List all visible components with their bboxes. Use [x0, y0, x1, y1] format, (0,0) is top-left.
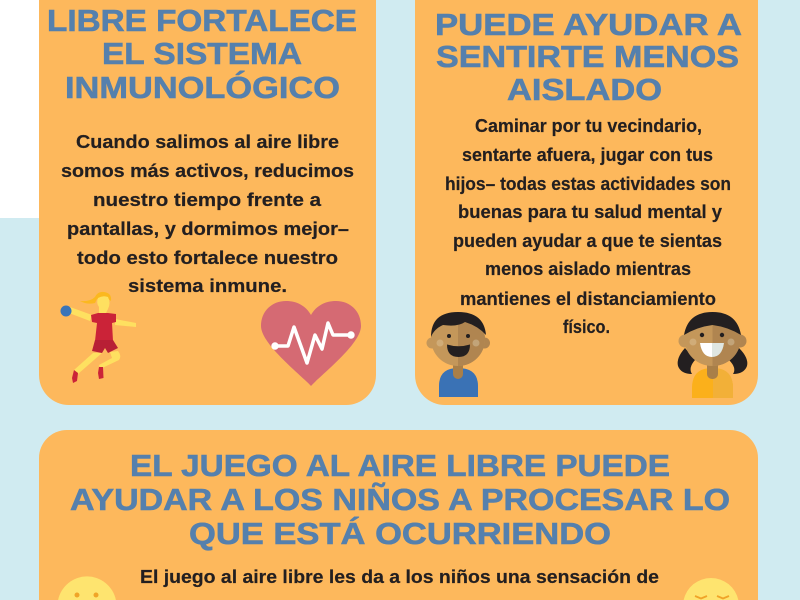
icon: smiling boy [426, 312, 490, 397]
heading: procesar lo que está ocurriendo: AYUDAR A LOS NIÑOS A PROCESAR LO [70, 482, 730, 517]
text block: sistema inmunológico: todo esto fortalece nuestro [77, 248, 338, 268]
heading: menos aislado [435, 7, 742, 107]
icon: happy face [58, 576, 116, 600]
panel: sistema inmunológico [39, 0, 376, 405]
panel: procesar lo que está ocurriendo [39, 430, 758, 600]
icon: face with closed eyes [684, 578, 738, 600]
text block: menos aislado: hijos– todas estas actividades son [445, 174, 731, 194]
text block: sistema inmunológico: nuestro tiempo frente a [93, 190, 322, 210]
heading: sistema inmunológico: LIBRE FORTALECE [47, 3, 357, 38]
text block: menos aislado [445, 116, 731, 337]
text block: sistema inmunológico: Cuando salimos al aire libre [76, 132, 339, 152]
icon: girl throwing ball [60, 292, 136, 383]
heading: menos aislado: AISLADO [507, 72, 662, 107]
heading: menos aislado: SENTIRTE MENOS [436, 39, 739, 74]
text block: menos aislado: Caminar por tu vecindario, [475, 116, 702, 136]
heading: sistema inmunológico [47, 3, 357, 105]
text block: sistema inmunológico: somos más activos, reducimos [61, 161, 354, 181]
heading: procesar lo que está ocurriendo [70, 448, 730, 551]
heading: procesar lo que está ocurriendo: EL JUEGO AL AIRE LIBRE PUEDE [130, 448, 670, 483]
heading: sistema inmunológico: INMUNOLÓGICO [65, 69, 340, 105]
text block: sistema inmunológico [61, 132, 354, 296]
text block: menos aislado: sentarte afuera, jugar con tus [462, 145, 713, 165]
heading: menos aislado: PUEDE AYUDAR A [435, 7, 742, 42]
panel: menos aislado [415, 0, 758, 405]
text block: menos aislado: pueden ayudar a que te sientas [453, 231, 722, 251]
icon: heart with pulse [261, 301, 361, 386]
heading: sistema inmunológico: EL SISTEMA [102, 36, 302, 71]
text block: sistema inmunológico: sistema inmune. [128, 276, 287, 296]
heading: procesar lo que está ocurriendo: QUE ESTÁ OCURRIENDO [189, 516, 611, 551]
text block: menos aislado: mantienes el distanciamiento [460, 289, 716, 309]
text block: menos aislado: físico. [563, 317, 610, 337]
text block: sistema inmunológico: pantallas, y dormimos mejor– [67, 219, 349, 239]
text block: menos aislado: buenas para tu salud mental y [458, 202, 722, 222]
icon: smiling girl [678, 312, 747, 398]
text block: menos aislado: menos aislado mientras [485, 259, 691, 279]
text block: procesar lo que está ocurriendo: El juego al aire libre les da a los niños una sensación de [140, 567, 659, 587]
